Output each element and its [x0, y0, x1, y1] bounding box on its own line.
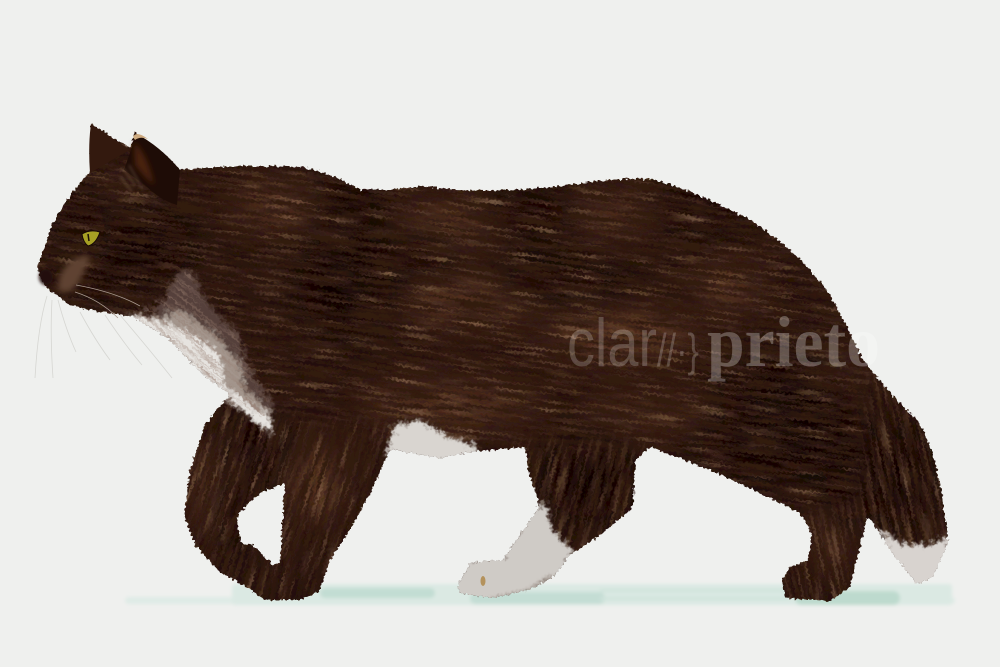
near ear — [120, 133, 180, 205]
fur strands: hind leg — [458, 421, 672, 598]
watermark — [567, 302, 880, 382]
nose — [39, 269, 53, 285]
white belly — [385, 420, 480, 464]
whiskers — [35, 285, 172, 378]
cat — [37, 124, 950, 602]
fur strands: body — [37, 124, 887, 528]
fur strands: front leg — [184, 392, 404, 602]
cat body silhouette — [37, 124, 950, 602]
toe claw — [480, 576, 486, 586]
watermark: clar — [567, 305, 657, 381]
white hind paw — [450, 504, 575, 604]
white chest — [125, 270, 273, 436]
watermark: prieto — [707, 302, 880, 382]
chest fur strands — [130, 263, 274, 428]
watermark: //·} — [657, 324, 699, 376]
white tail tip — [880, 530, 950, 590]
ground shadow — [125, 584, 955, 605]
muzzle highlight — [58, 256, 90, 292]
illustration: walking cat — [34, 124, 954, 606]
fur strands: rear leg and tail — [782, 361, 950, 602]
fur shading patches — [58, 167, 933, 568]
far ear — [89, 124, 130, 173]
paw shadow — [490, 574, 552, 598]
eye — [82, 231, 100, 246]
